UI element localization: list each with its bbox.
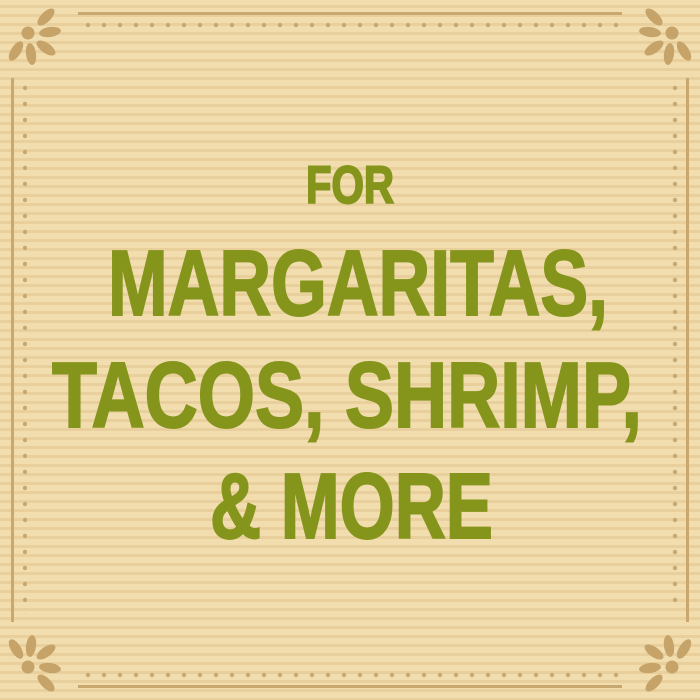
- headline text: & MORE: [210, 454, 493, 558]
- headline text: FOR: [306, 156, 394, 215]
- headline text: [52, 156, 642, 558]
